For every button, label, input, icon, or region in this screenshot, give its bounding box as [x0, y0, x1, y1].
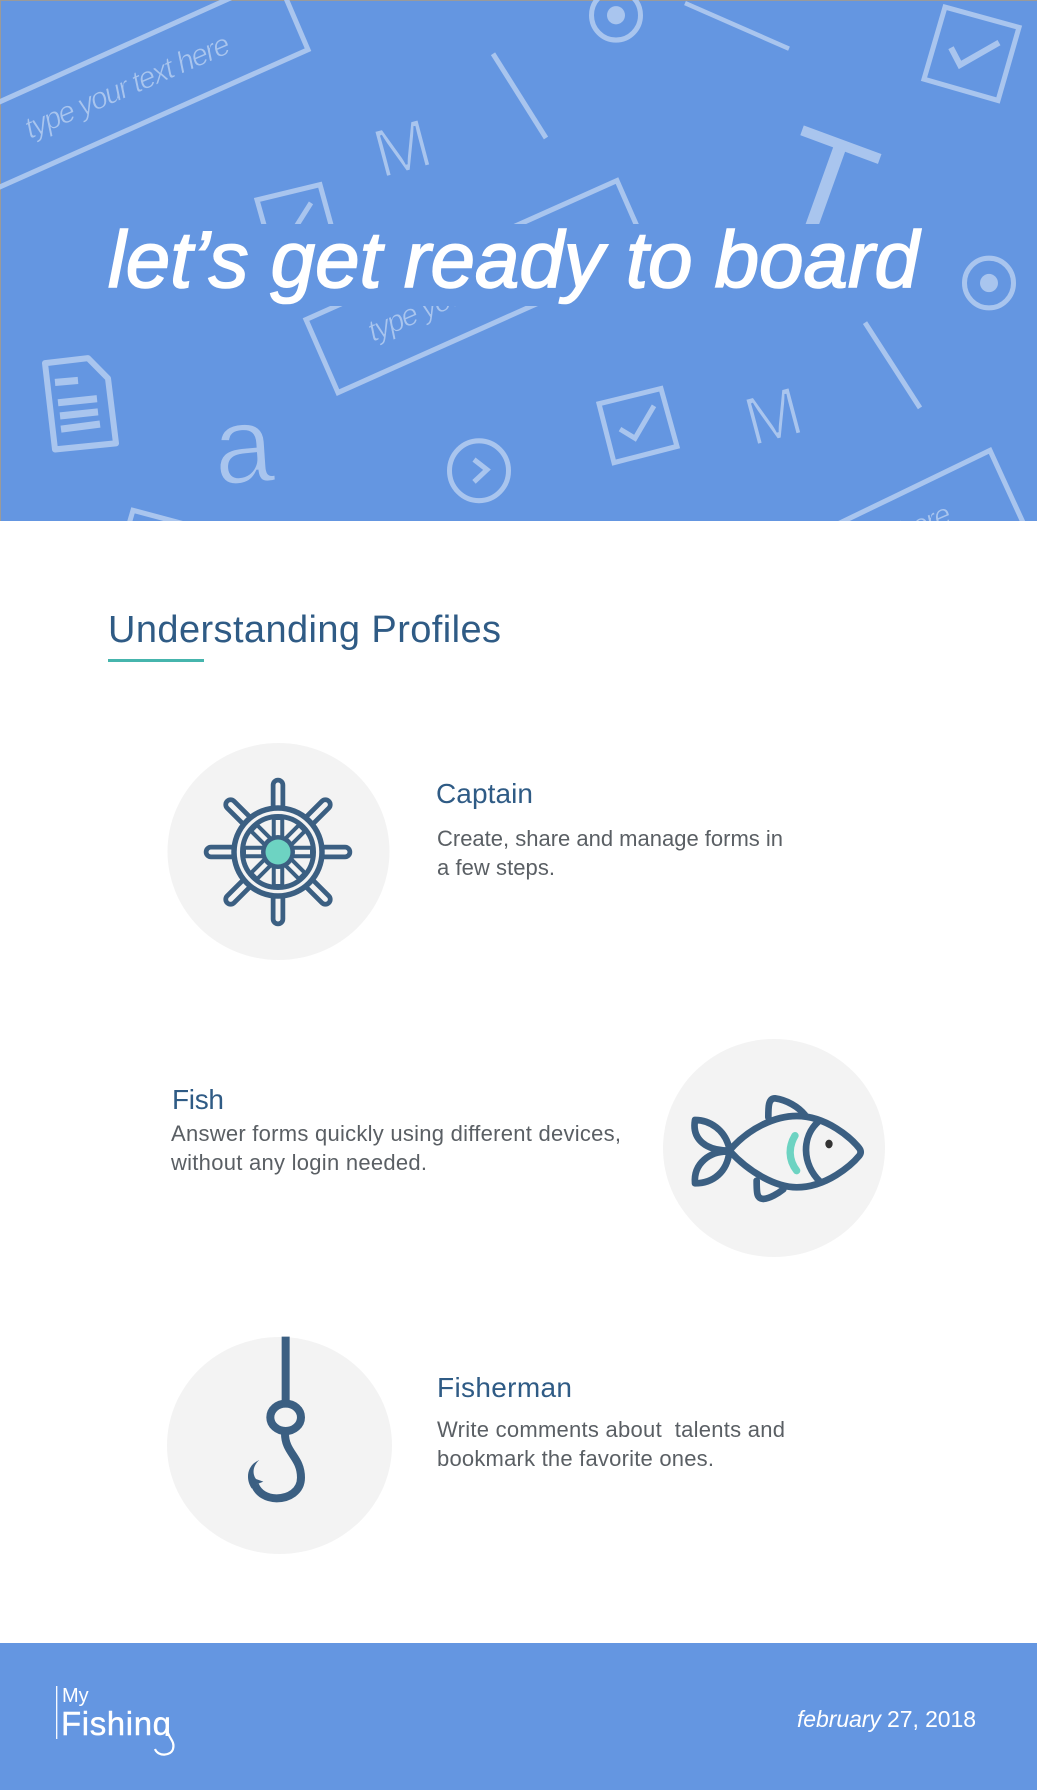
panel: footer	[0, 1643, 1037, 1790]
logo: Fishing	[61, 1705, 171, 1742]
target circle top	[592, 0, 640, 40]
circled arrow icon	[450, 441, 508, 501]
check box top right	[924, 7, 1019, 100]
letter M: M	[365, 103, 440, 193]
panel: hero banner	[0, 0, 1037, 521]
middle text box	[306, 181, 649, 393]
document icon	[45, 358, 116, 449]
title backing strip	[261, 224, 820, 306]
icon: fish	[663, 1039, 885, 1257]
icon: ship wheel	[168, 743, 390, 960]
hero decorative pattern	[0, 0, 1025, 521]
letter M lower: M	[736, 371, 811, 461]
middle text box: type your text here	[363, 231, 578, 348]
panel: fish	[170, 1039, 885, 1257]
captain heading: Captain	[436, 778, 533, 809]
fisherman description	[437, 1417, 785, 1471]
date: february 27, 2018	[797, 1706, 976, 1732]
fisherman description: Write comments about talents and	[437, 1417, 785, 1442]
text box top left: type your text here	[20, 28, 235, 145]
fish description: Answer forms quickly using different devices,	[171, 1121, 621, 1146]
captain description: a few steps.	[437, 855, 555, 880]
letter T: T	[755, 93, 896, 282]
line right	[865, 323, 920, 408]
partial box bottom left	[127, 507, 182, 521]
fisherman description: bookmark the favorite ones.	[437, 1446, 714, 1471]
target circle right	[964, 258, 1014, 308]
fisherman heading: Fisherman	[437, 1372, 572, 1403]
letter a: a	[209, 383, 278, 509]
text box bottom right	[838, 447, 1025, 521]
text box bottom right: type your text here	[741, 497, 956, 615]
heading: Understanding Profiles: Understanding Profiles	[108, 609, 501, 651]
captain description	[437, 826, 783, 880]
title: let’s get ready to board	[108, 215, 922, 304]
captain description: Create, share and manage forms in	[437, 826, 783, 851]
check box lower	[599, 389, 677, 463]
panel: fisherman	[167, 1337, 785, 1554]
logo: My	[62, 1685, 89, 1707]
line top right	[685, 3, 789, 49]
logo	[57, 1685, 173, 1755]
text box top left	[0, 0, 308, 189]
fish description: without any login needed.	[170, 1150, 427, 1175]
small check box behind title	[257, 185, 332, 228]
panel: captain	[168, 743, 783, 960]
diagonal line	[493, 54, 546, 138]
icon: fish hook	[167, 1337, 392, 1554]
fish description	[170, 1121, 621, 1175]
fish heading: Fish	[172, 1084, 224, 1115]
